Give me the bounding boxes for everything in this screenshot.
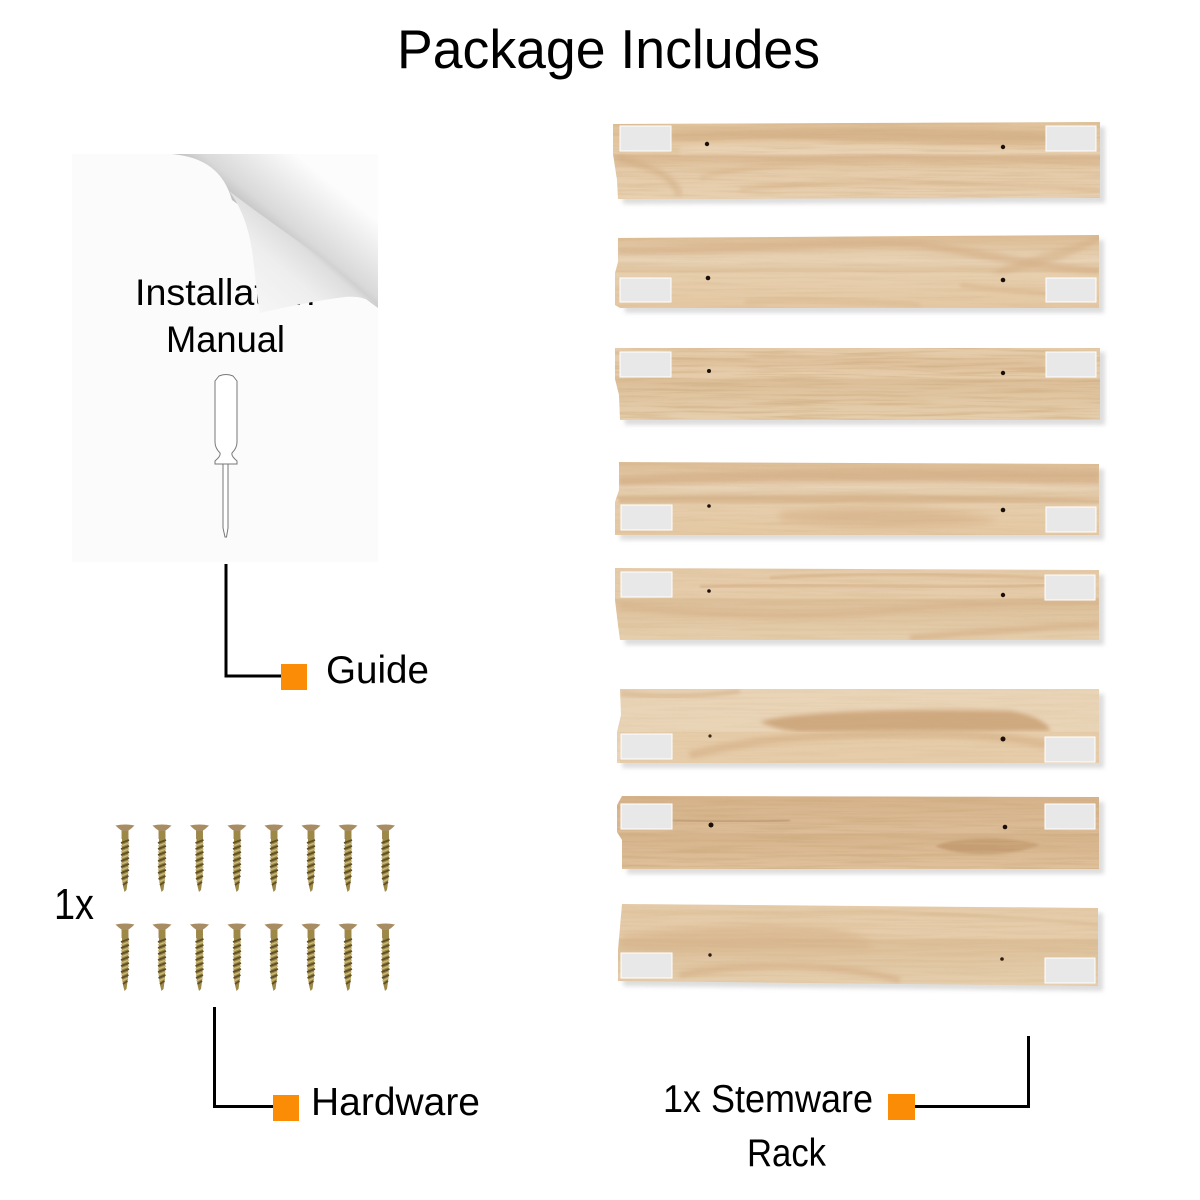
icon: screwdriver	[215, 374, 237, 537]
marker: guide	[281, 664, 307, 690]
manual title text: Manual	[166, 319, 285, 360]
screws row 1	[116, 824, 395, 892]
plank 7	[613, 794, 1104, 874]
marker: stemware rack	[888, 1094, 915, 1120]
manual title text: Installation	[135, 272, 315, 313]
panel: installation manual guide	[72, 154, 378, 562]
plank 1	[613, 120, 1105, 204]
screws row 2	[116, 924, 395, 991]
connector: guide	[226, 564, 282, 676]
panel: hardware screws	[54, 824, 395, 991]
plank 5	[613, 566, 1104, 645]
marker: hardware	[273, 1095, 299, 1121]
page curl shadow	[172, 154, 378, 308]
plank 8	[613, 902, 1103, 991]
plank 4	[613, 460, 1104, 540]
label: stemware rack: 1x Stemware	[663, 1078, 873, 1121]
page curl flap	[229, 191, 378, 313]
connector: stemware rack	[914, 1036, 1028, 1106]
title: Package Includes	[397, 18, 820, 80]
label: guide: Guide	[326, 649, 429, 692]
manual page	[72, 154, 378, 562]
plank 3	[613, 346, 1105, 425]
plank 6	[613, 687, 1104, 768]
label: hardware: Hardware	[311, 1081, 480, 1124]
connector: hardware	[214, 1007, 274, 1106]
label: stemware rack: Rack	[747, 1132, 826, 1175]
plank 2	[613, 234, 1104, 313]
quantity label: 1x	[54, 880, 94, 929]
